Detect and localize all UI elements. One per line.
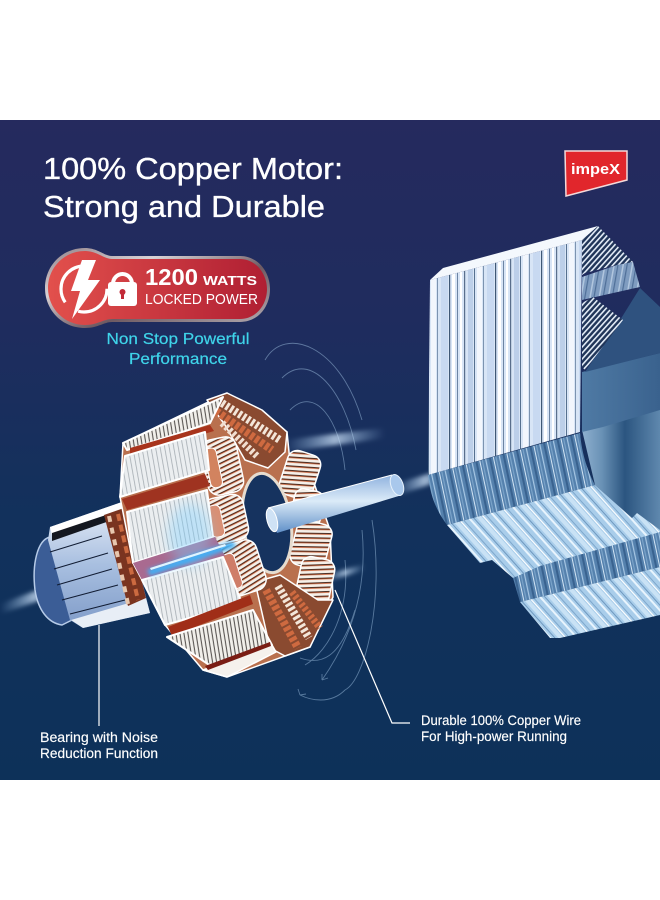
core: curved lower face (428, 433, 595, 525)
subheading: non stop performance (106, 331, 250, 368)
core: mid face (582, 353, 660, 432)
subheading: non stop performance: Non Stop Powerful (106, 331, 250, 348)
core: dark upper wall (585, 288, 660, 372)
glow between coils (147, 503, 236, 576)
coil: bottom (167, 595, 276, 677)
core: tooth band (582, 262, 640, 300)
bearing: cylinder body (48, 502, 150, 628)
stator with copper windings (120, 393, 337, 677)
stator: right copper lobes (277, 448, 337, 609)
light streaks (0, 428, 455, 614)
core: inner recess (582, 408, 660, 532)
panel: dark blue background (0, 120, 660, 780)
core: front barcode face (428, 240, 582, 475)
core: dark step band (513, 532, 660, 602)
stator: silhouette underlay (120, 393, 333, 677)
bearing: commutator copper (104, 508, 146, 606)
stator: top winding cluster (207, 393, 287, 468)
icon: lightning bolt in circle (61, 260, 107, 319)
leader line: copper wire (335, 590, 410, 723)
logo: impex: impeX (571, 161, 620, 178)
title (43, 151, 343, 224)
title: Strong and Durable (43, 189, 325, 224)
badge: 1200 watts locked power (45, 248, 270, 328)
core: upper tooth (582, 226, 633, 275)
core: bottom pale band (520, 567, 660, 638)
callout: bearing: Reduction Function (40, 746, 158, 761)
badge text: LOCKED POWER (145, 291, 258, 308)
callout: bearing: Bearing with Noise (40, 730, 158, 745)
stator: bottom winding cluster (255, 575, 333, 656)
callout: copper wire: Durable 100% Copper Wire (421, 713, 581, 728)
laminated motor core, right side (428, 226, 660, 638)
concentric sound-wave arcs (265, 343, 376, 700)
stator: inner copper lobes (199, 435, 269, 599)
core: top highlight (430, 226, 598, 280)
motor shaft (264, 473, 406, 533)
callout: bearing (40, 730, 158, 761)
core: pale lower band (447, 485, 660, 578)
coil: top (120, 397, 223, 497)
coil: upper middle (122, 474, 213, 563)
bearing (34, 502, 150, 628)
badge text (145, 264, 258, 308)
core: second tooth (582, 297, 623, 370)
stator: rotor bore (236, 470, 298, 576)
logo: impex (565, 151, 627, 196)
title: 100% Copper Motor: (43, 151, 343, 186)
leader line: bearing (98, 625, 100, 726)
callout: copper wire (421, 713, 581, 744)
subheading: non stop performance: Performance (129, 351, 227, 368)
coil: lower middle (133, 537, 242, 625)
badge text: WATTS (203, 273, 257, 288)
icon: padlock (108, 274, 137, 306)
bearing: end cap (34, 537, 72, 625)
badge text: 1200 (145, 264, 198, 290)
callout: copper wire: For High-power Running (421, 729, 567, 744)
